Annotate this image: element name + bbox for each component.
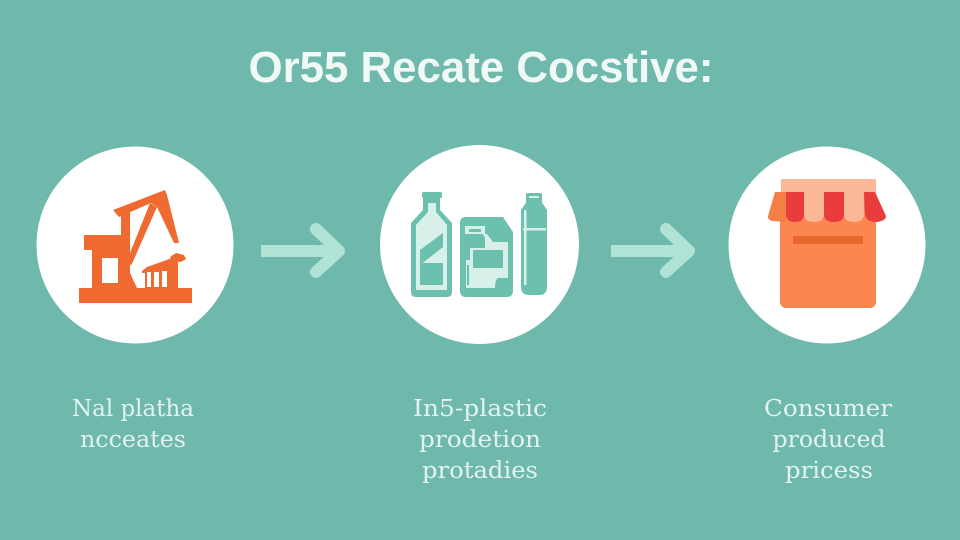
panel: consumer stage bbox=[728, 146, 926, 344]
icon: orange pump jack and refinery bbox=[79, 190, 192, 303]
white circle bbox=[728, 146, 926, 344]
caption: naphtha: ncceates bbox=[80, 427, 186, 453]
white circle bbox=[36, 146, 234, 344]
arrow: second bbox=[611, 229, 689, 272]
caption: plastic production: prodetion bbox=[419, 427, 541, 453]
icon: plastic jug bbox=[460, 217, 513, 297]
panel: plastic production stage bbox=[380, 145, 579, 344]
icon: plastic bottle bbox=[411, 192, 452, 297]
icon: slim tube bottle bbox=[521, 193, 547, 295]
icon: storefront bbox=[768, 179, 886, 308]
caption: plastic production: protadies bbox=[422, 458, 538, 484]
caption: consumer: pricess bbox=[785, 458, 873, 484]
panel: naphtha stage bbox=[36, 146, 234, 344]
caption: plastic production: In5-plastic bbox=[413, 396, 547, 422]
white circle bbox=[380, 145, 579, 344]
caption: naphtha: Nal platha bbox=[72, 396, 194, 422]
caption: consumer: produced bbox=[772, 427, 886, 453]
caption: consumer: Consumer bbox=[764, 396, 892, 422]
title: Or55 Recate Cocstive: bbox=[248, 43, 714, 92]
arrow: first bbox=[261, 229, 339, 272]
